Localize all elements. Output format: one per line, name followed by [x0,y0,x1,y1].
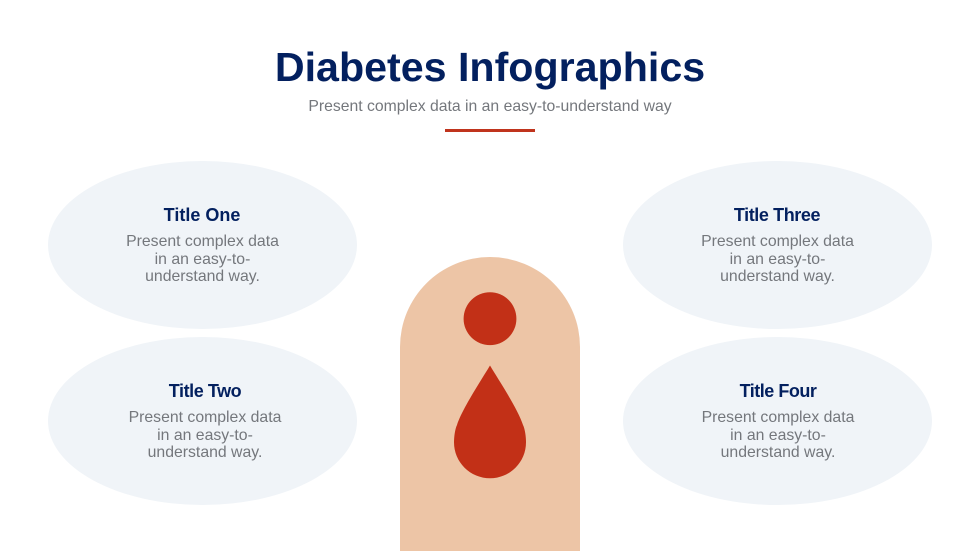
text: title three [701,233,854,285]
panel: title four [623,337,932,505]
text: title four: in an easy-to- [730,426,826,444]
icon: finger with blood drop [400,257,580,551]
text: title two: in an easy-to- [157,426,253,444]
text: title two: Present complex data [129,409,281,426]
title underline [445,129,535,132]
heading: title two: Title Two [169,381,241,401]
text: title three: understand way. [720,268,835,285]
text: title four [702,409,854,461]
text: title two [129,409,282,461]
text: title one: Present complex data [126,233,279,250]
text: title four: understand way. [721,444,835,461]
heading: title four: Title Four [740,381,816,401]
heading: title three: Title Three [734,205,820,225]
fingertip blood spot [464,292,516,345]
text: title one [126,233,279,285]
blood drop [454,366,526,478]
panel: title two [48,337,357,505]
subtitle: Present complex data in an easy-to-understand way [308,98,672,115]
text: title three: Present complex data [701,233,854,250]
title: Diabetes Infographics [275,44,705,90]
text: title one: understand way. [145,268,260,285]
heading: title one: Title One [164,205,240,225]
panel: title three [623,161,932,329]
finger [400,257,580,551]
text: title two: understand way. [148,444,262,461]
text: title four: Present complex data [702,409,854,426]
text: title one: in an easy-to- [155,250,250,268]
panel: title one [48,161,357,329]
text: title three: in an easy-to- [730,250,825,268]
